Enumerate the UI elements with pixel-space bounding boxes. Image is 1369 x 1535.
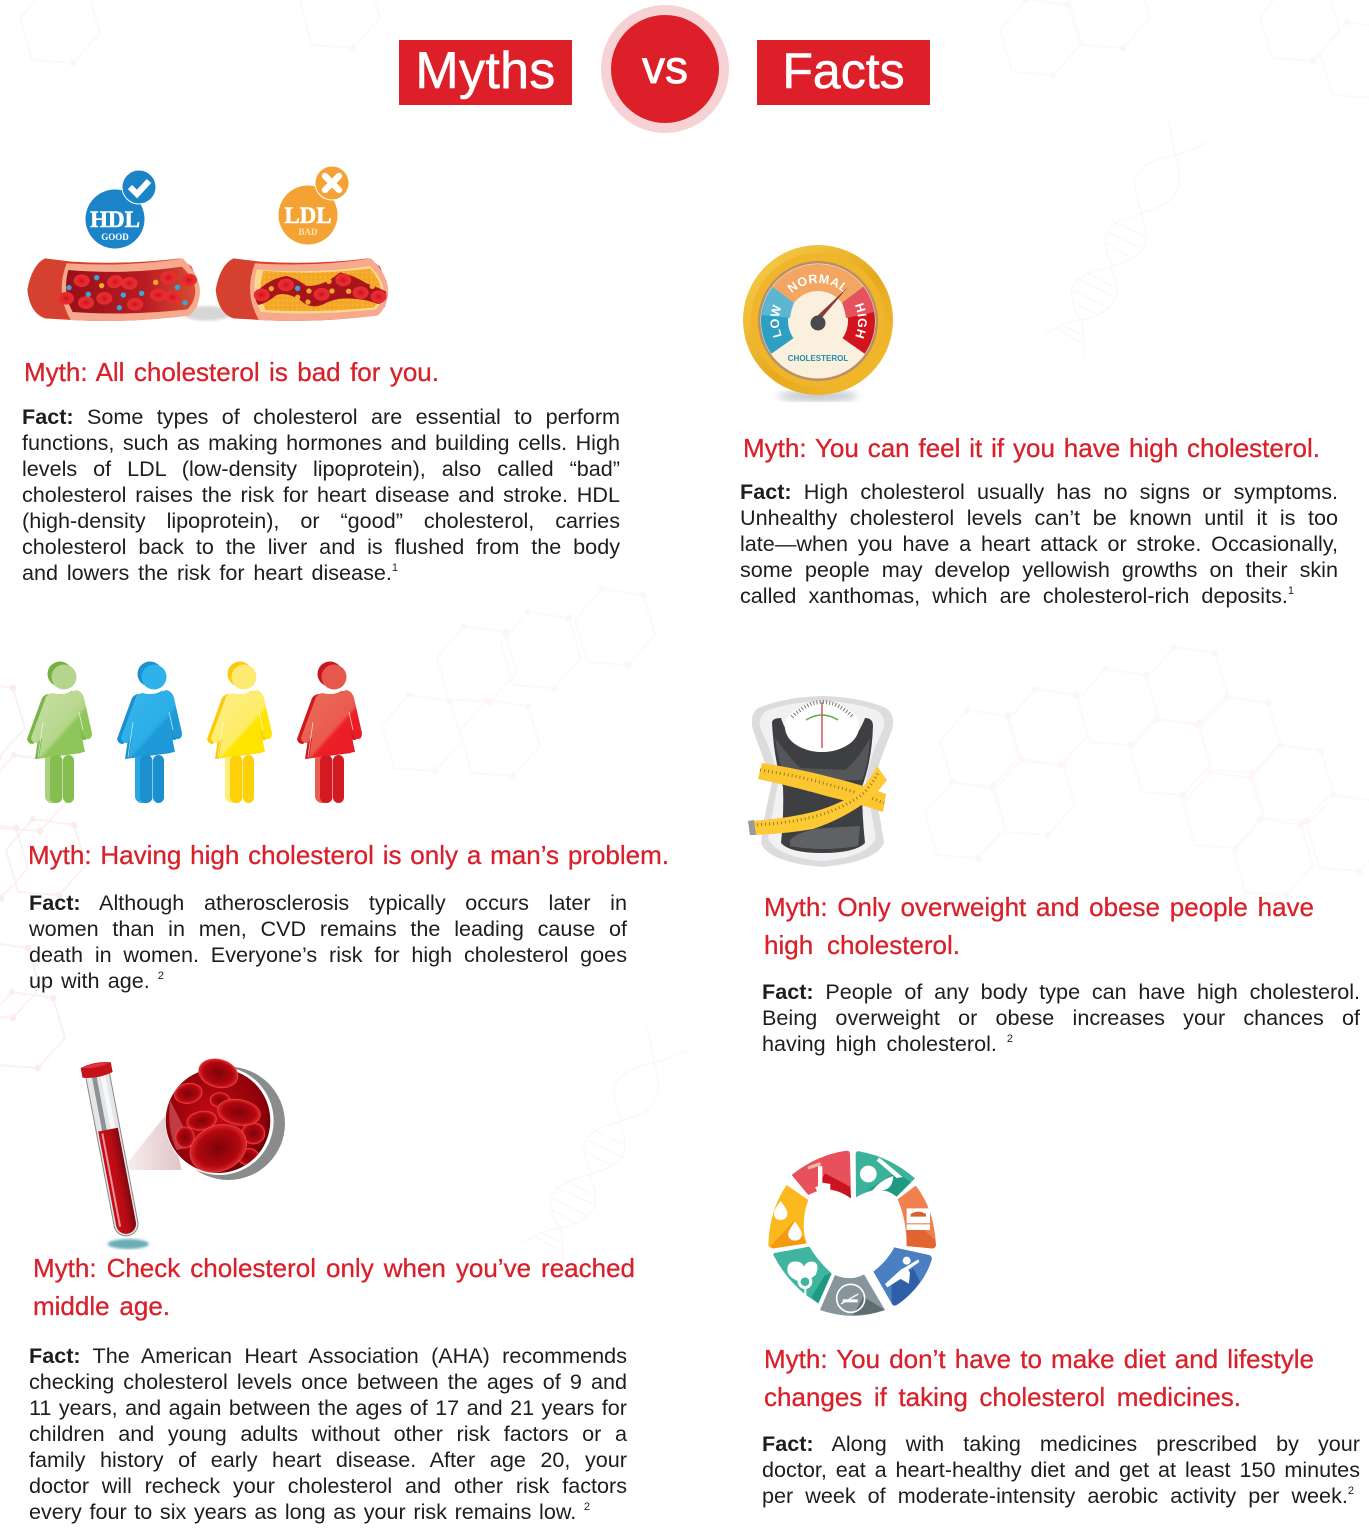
fact text 2 bbox=[740, 479, 1338, 608]
fact text 4: Fact: People of any body type can have high cholesterol. bbox=[762, 979, 1360, 1004]
heading: myth 6 bbox=[764, 1344, 1314, 1412]
icon: four women figures bbox=[27, 662, 362, 803]
fact text 5: doctor will recheck your cholesterol and other risk factors bbox=[29, 1473, 627, 1498]
fact text 1: (high-density lipoprotein), or “good” cholesterol, carries bbox=[22, 508, 620, 533]
fact text 5: family history of early heart disease. After age 20, your bbox=[29, 1447, 627, 1472]
HDL badge: HDL bbox=[90, 207, 140, 232]
icon: cholesterol gauge: NORMAL bbox=[787, 274, 846, 293]
heading: myth 4 bbox=[764, 892, 1314, 960]
fact text 5: every four to six years as long as your risk remains low. 2 bbox=[29, 1499, 590, 1524]
HDL badge: GOOD bbox=[101, 232, 129, 242]
fact text 6: per week of moderate-intensity aerobic activity per week.2 bbox=[762, 1483, 1354, 1508]
fact text 3: Fact: Although atherosclerosis typically occurs later in bbox=[29, 890, 627, 915]
fact text 2: Fact: High cholesterol usually has no signs or symptoms. bbox=[740, 479, 1338, 504]
heading: myth 6: changes if taking cholesterol medicines. bbox=[764, 1382, 1241, 1412]
icon: cholesterol gauge bbox=[743, 245, 893, 402]
left artery bbox=[27, 258, 200, 321]
heading: myth 1: Myth: All cholesterol is bad for you. bbox=[24, 357, 439, 387]
panel: only a man's problem bbox=[27, 662, 669, 993]
fact text 2: late—when you have a heart attack or stroke. Occasionally, bbox=[740, 531, 1338, 556]
fact text 1: levels of LDL (low-density lipoprotein), also called “bad” bbox=[22, 456, 620, 481]
green figure bbox=[27, 662, 92, 803]
heading: myth 5: Myth: Check cholesterol only when you’ve reached bbox=[33, 1253, 635, 1283]
vs badge bbox=[601, 5, 729, 133]
fact text 1: Fact: Some types of cholesterol are essential to perform bbox=[22, 404, 620, 429]
fact text 1: cholesterol back to the liver and is flushed from the body bbox=[22, 534, 620, 559]
fact text 4 bbox=[762, 979, 1360, 1056]
panel: all cholesterol is bad bbox=[22, 166, 620, 585]
heading: myth 5: middle age. bbox=[33, 1291, 170, 1321]
fact text 6 bbox=[762, 1431, 1360, 1508]
heading: myth 2: Myth: You can feel it if you have high cholesterol. bbox=[743, 433, 1320, 463]
fact text 3: up with age. 2 bbox=[29, 968, 164, 993]
panel: you can feel high cholesterol bbox=[740, 245, 1338, 608]
fact text 4: having high cholesterol. 2 bbox=[762, 1031, 1013, 1056]
fact text 5: Fact: The American Heart Association (AHA) recommends bbox=[29, 1343, 627, 1368]
LDL badge: BAD bbox=[298, 227, 318, 237]
fact text 6: doctor, eat a heart-healthy diet and get at least 150 minutes bbox=[762, 1457, 1360, 1482]
fact text 3 bbox=[29, 890, 628, 993]
icon: cholesterol gauge: HIGH bbox=[855, 302, 867, 339]
icon: blood test tube and magnified cells bbox=[80, 1058, 285, 1250]
fact text 5: 11 years, and again between the ages of 17 and 21 years for bbox=[29, 1395, 627, 1420]
title: Facts: Facts bbox=[782, 43, 905, 99]
heading: myth 4: Myth: Only overweight and obese people have bbox=[764, 892, 1314, 922]
fact text 5: children and young adults without other risk factors or a bbox=[29, 1421, 627, 1446]
red figure bbox=[297, 662, 362, 803]
vs badge: vs bbox=[642, 41, 688, 93]
fact text 2: some people may develop yellowish growths on their skin bbox=[740, 557, 1338, 582]
measuring tape bbox=[748, 763, 887, 835]
icon: HDL and LDL arteries bbox=[27, 166, 388, 322]
fact text 2: called xanthomas, which are cholesterol-rich deposits.1 bbox=[740, 583, 1294, 608]
fact text 3: death in women. Everyone’s risk for high cholesterol goes bbox=[29, 942, 627, 967]
heading: myth 5 bbox=[33, 1253, 635, 1321]
LDL badge: LDL bbox=[284, 203, 332, 228]
LDL badge bbox=[278, 166, 349, 244]
lifestyle glyphs bbox=[774, 1158, 930, 1312]
heading: myth 4: high cholesterol. bbox=[764, 930, 960, 960]
heading: myth 3: Myth: Having high cholesterol is only a man’s problem. bbox=[28, 840, 669, 870]
title banner: Myths vs Facts bbox=[399, 5, 930, 133]
heading: myth 6: Myth: You don’t have to make diet and lifestyle bbox=[764, 1344, 1314, 1374]
fact text 1: and lowers the risk for heart disease.1 bbox=[22, 560, 398, 585]
right artery bbox=[216, 258, 388, 321]
fact text 3: women than in men, CVD remains the leading cause of bbox=[29, 916, 627, 941]
fact text 1: cholesterol raises the risk for heart disease and stroke. HDL bbox=[22, 482, 620, 507]
panel: lifestyle changes with medicines bbox=[762, 1150, 1360, 1508]
yellow figure bbox=[207, 662, 272, 803]
icon: cholesterol gauge: LOW bbox=[770, 304, 782, 338]
panel: check only at middle age bbox=[29, 1058, 635, 1524]
fact text 1 bbox=[22, 404, 620, 585]
fact text 4: Being overweight or obese increases your chances of bbox=[762, 1005, 1360, 1030]
icon: heart ring of lifestyle segments bbox=[768, 1150, 936, 1316]
test tube bbox=[80, 1060, 143, 1239]
fact text 1: functions, such as making hormones and building cells. High bbox=[22, 430, 620, 455]
icon: scale with measuring tape bbox=[748, 696, 894, 867]
panel: only overweight people bbox=[748, 696, 1360, 1056]
fact text 5: checking cholesterol levels once between the ages of 9 and bbox=[29, 1369, 627, 1394]
fact text 2: Unhealthy cholesterol levels can’t be known until it is too bbox=[740, 505, 1338, 530]
icon: cholesterol gauge: CHOLESTEROL bbox=[788, 354, 848, 363]
HDL badge bbox=[86, 170, 156, 248]
title: Myths: Myths bbox=[415, 42, 556, 100]
fact text 6: Fact: Along with taking medicines prescribed by your bbox=[762, 1431, 1360, 1456]
blue figure bbox=[117, 662, 182, 803]
fact text 5 bbox=[29, 1343, 627, 1524]
title: Facts bbox=[757, 40, 930, 105]
